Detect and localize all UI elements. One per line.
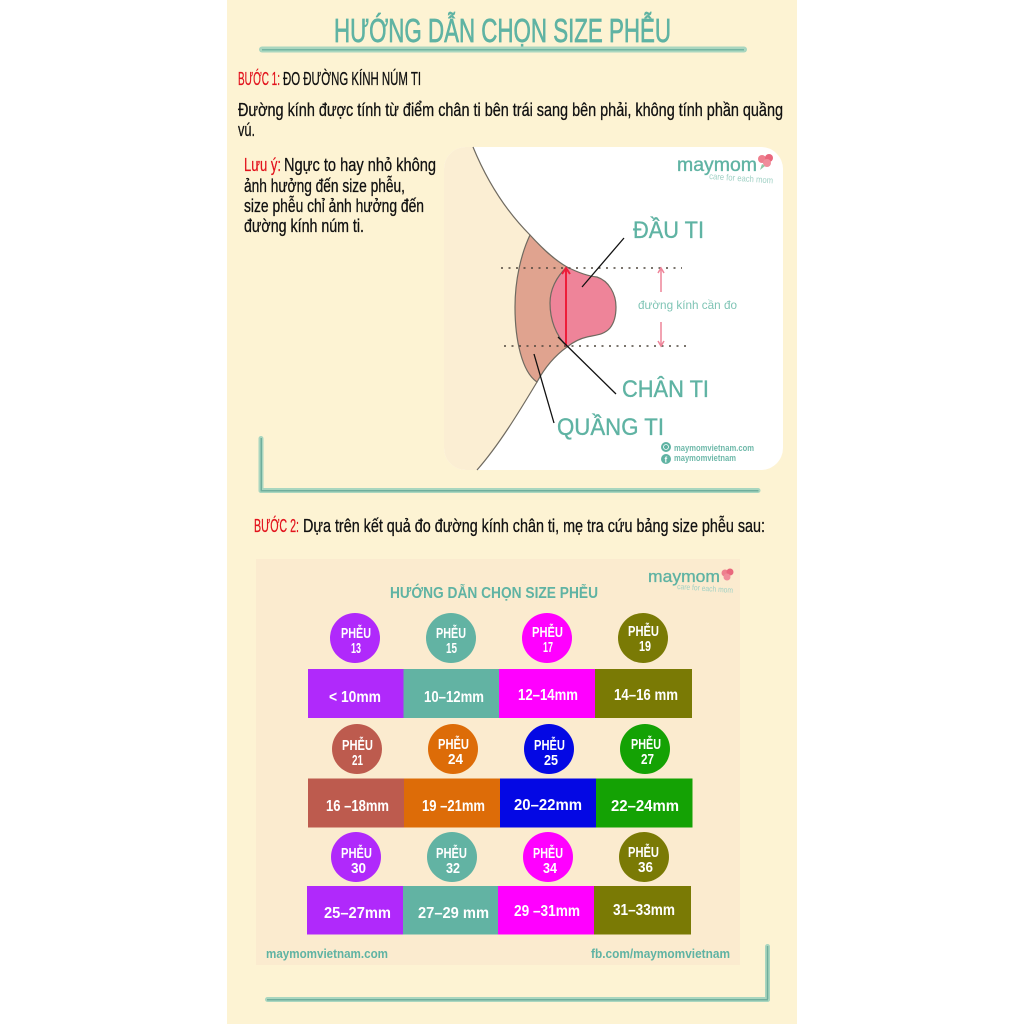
size row 2 circles: PHỄU (631, 736, 661, 753)
size row 3 circles: 32 (446, 860, 460, 877)
dotted measure guides (501, 268, 686, 346)
size row 1 circles: PHỄU (532, 624, 563, 641)
size row 3 circles: 34 (543, 860, 558, 877)
text block: step 1 description (238, 100, 783, 140)
corner bracket: step 1 (258, 436, 760, 493)
size row 2 circles: 21 (352, 752, 363, 769)
text block: note: ảnh hưởng đến size phễu, (244, 175, 405, 196)
size row 3 circles (331, 832, 669, 882)
logo: maymom: maymom (677, 155, 757, 176)
size row 2 bars: 22–24mm (611, 798, 679, 815)
size row 2 circles (332, 724, 670, 774)
logo: maymom: care for each mom (709, 171, 773, 185)
size row 2 circles: 25 (544, 752, 558, 769)
label: areola: QUẦNG TI (557, 413, 664, 441)
size row 1 circles: 19 (639, 638, 651, 655)
label lines (534, 238, 624, 423)
footer: website: maymomvietnam.com (266, 946, 388, 961)
social links: maymomvietnam (674, 453, 736, 464)
areola (515, 235, 567, 382)
size row 2 circles: 27 (641, 751, 654, 768)
size row 1 bars (308, 669, 692, 718)
size row 3 bars: 31–33mm (613, 902, 675, 919)
arrow: red diameter (562, 268, 570, 346)
heading: step 1: BƯỚC 1: (238, 68, 280, 89)
text block: note: Lưu ý: (244, 155, 281, 175)
size row 1 circles (330, 613, 668, 663)
size row 3 circles: PHỄU (628, 844, 659, 861)
size row 2 bars: 16 –18mm (326, 798, 389, 815)
breast body (444, 147, 536, 470)
social links (661, 442, 754, 464)
size row 2 bars: 19 –21mm (422, 798, 485, 815)
social links: maymomvietnam.com (674, 443, 754, 454)
social links: f (664, 456, 668, 464)
breast outline (473, 147, 537, 470)
size row 1 circles: PHỄU (628, 623, 659, 640)
label: nipple: ĐẦU TI (633, 216, 704, 244)
heading: step 2: BƯỚC 2: (254, 515, 299, 536)
logo: maymom small: maymom (648, 567, 720, 586)
size row 1 circles: PHỄU (341, 625, 371, 642)
title: HƯỚNG DẪN CHỌN SIZE PHỄU (334, 12, 671, 49)
table heading: HƯỚNG DẪN CHỌN SIZE PHỄU (390, 583, 598, 602)
corner bracket: step 2 (265, 944, 770, 1002)
logo: maymom small: care for each mom (677, 582, 734, 595)
text block: note: size phễu chỉ ảnh hưởng đến (244, 195, 424, 216)
size row 2 circles: PHỄU (342, 737, 373, 754)
size row 1 circles: 15 (446, 640, 457, 657)
size row 2 bars: 20–22mm (514, 797, 582, 814)
size row 2 circles: 24 (448, 751, 464, 768)
footer: facebook: fb.com/maymomvietnam (591, 946, 730, 961)
size row 2 circles: PHỄU (438, 736, 469, 753)
size row 3 circles: PHỄU (533, 845, 563, 862)
size row 1 bars: < 10mm (329, 689, 381, 706)
nipple (550, 267, 616, 347)
size row 1 circles: 17 (543, 639, 553, 656)
size row 1 bars: 10–12mm (424, 689, 484, 706)
size row 3 bars: 25–27mm (324, 905, 391, 922)
size row 3 bars (307, 886, 691, 934)
size row 1 circles: 13 (351, 640, 361, 657)
size row 1 bars: 14–16 mm (614, 687, 678, 704)
label: diameter: đường kính cần đo (638, 298, 737, 312)
text block: note: đường kính núm ti. (244, 216, 364, 236)
arrow: pink up (658, 268, 664, 292)
size row 3 circles: 30 (351, 860, 366, 877)
label: nipple base: CHÂN TI (622, 376, 709, 403)
heading: step 1 (238, 68, 421, 89)
size row 3 circles: PHỄU (436, 845, 467, 862)
logo: maymom (677, 154, 773, 185)
title (259, 12, 747, 52)
panel: anatomy diagram (444, 147, 783, 470)
size row 3 circles: PHỄU (341, 845, 372, 862)
text block: note (244, 155, 436, 236)
arrow: pink down (658, 322, 664, 346)
panel: size table (256, 559, 740, 965)
size row 1 circles: PHỄU (436, 625, 466, 642)
text block: note: Ngực to hay nhỏ không (284, 155, 436, 175)
size row 3 bars: 29 –31mm (514, 903, 580, 920)
text block: step 1 description: vú. (238, 120, 255, 140)
heading: step 1: ĐO ĐƯỜNG KÍNH NÚM TI (283, 68, 421, 89)
size row 2 circles: PHỄU (534, 737, 565, 754)
heading: step 2: Dựa trên kết quả đo đường kính chân ti, mẹ tra cứu bảng size phễu sau: (303, 515, 765, 536)
logo: maymom small (648, 567, 734, 595)
size row 1 bars: 12–14mm (518, 687, 578, 704)
size row 3 bars: 27–29 mm (418, 905, 489, 922)
size row 3 circles: 36 (638, 859, 653, 876)
size row 2 bars (308, 778, 692, 828)
text block: step 1 description: Đường kính được tính từ điểm chân ti bên trái sang bên phải, không tính phần quầng (238, 100, 783, 120)
